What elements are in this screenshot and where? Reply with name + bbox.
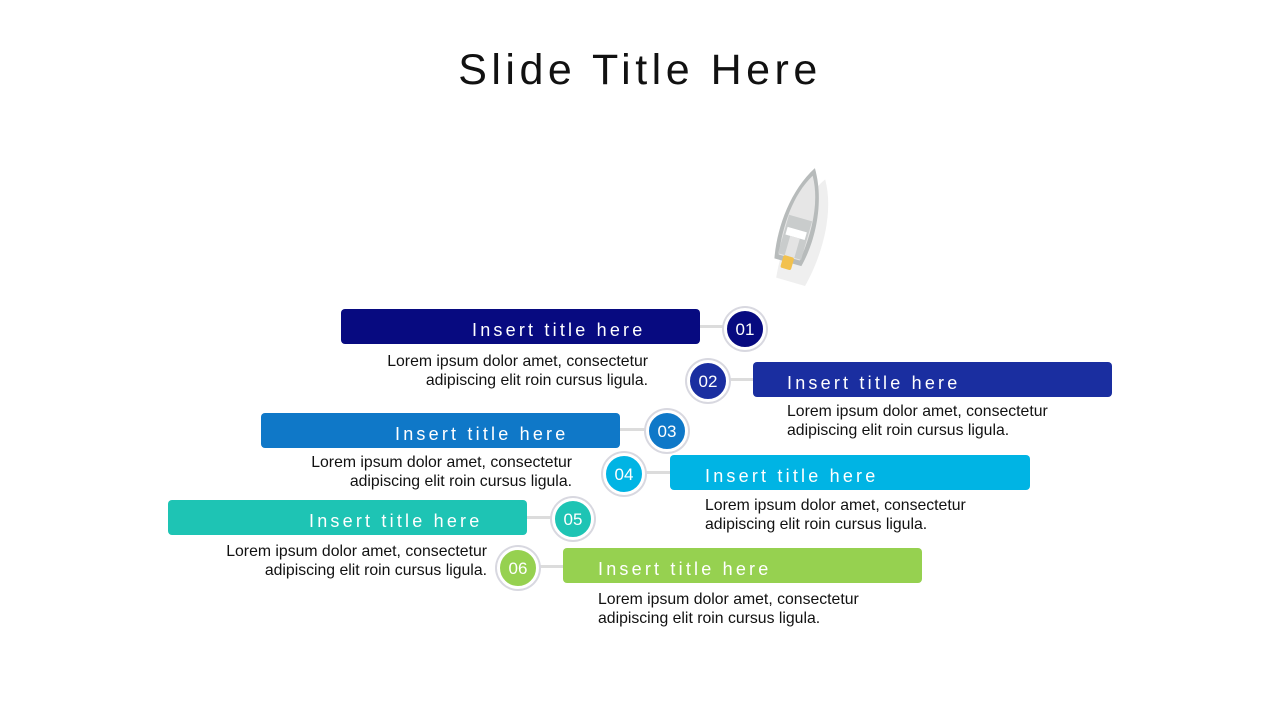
- bar 03: [261, 413, 620, 448]
- text 05: Lorem ipsum dolor amet, consectetur: [226, 543, 487, 560]
- text 03: adipiscing elit roin cursus ligula.: [350, 473, 572, 490]
- text 06: Lorem ipsum dolor amet, consectetur: [598, 591, 859, 608]
- circle 06: [497, 547, 539, 589]
- title: Slide Title Here: [458, 46, 822, 94]
- circle 01: 01: [736, 320, 754, 339]
- text 06: adipiscing elit roin cursus ligula.: [598, 610, 820, 627]
- circle 02: 02: [699, 372, 717, 391]
- text 06: [598, 591, 859, 627]
- text 01: Lorem ipsum dolor amet, consectetur: [387, 353, 648, 370]
- text 02: [787, 403, 1048, 439]
- bar 01: [341, 309, 700, 344]
- text 04: adipiscing elit roin cursus ligula.: [705, 516, 927, 533]
- circle 05: 05: [564, 510, 582, 529]
- circle 05: [552, 498, 594, 540]
- text 05: adipiscing elit roin cursus ligula.: [265, 562, 487, 579]
- text 01: adipiscing elit roin cursus ligula.: [426, 372, 648, 389]
- text 04: [705, 497, 966, 533]
- bar 05: [168, 500, 527, 535]
- text 05: [226, 543, 487, 579]
- icon: boat: [774, 168, 828, 286]
- circle 03: [646, 410, 688, 452]
- text 04: Lorem ipsum dolor amet, consectetur: [705, 497, 966, 514]
- circle 04: 04: [615, 465, 633, 484]
- text 03: [311, 454, 572, 490]
- bar 04: [670, 455, 1030, 490]
- circle 01: [724, 308, 766, 350]
- circle 03: 03: [658, 422, 676, 441]
- bar 05: Insert title here: [309, 511, 482, 531]
- circle 02: [687, 360, 729, 402]
- circle 04: [603, 453, 645, 495]
- text 01: [387, 353, 648, 389]
- circle 06: 06: [509, 559, 527, 578]
- text 02: adipiscing elit roin cursus ligula.: [787, 422, 1009, 439]
- bar 03: Insert title here: [395, 424, 568, 444]
- bar 01: Insert title here: [472, 320, 645, 340]
- bar 04: Insert title here: [705, 466, 878, 486]
- text 02: Lorem ipsum dolor amet, consectetur: [787, 403, 1048, 420]
- text 03: Lorem ipsum dolor amet, consectetur: [311, 454, 572, 471]
- bar 02: [753, 362, 1112, 397]
- bar 02: Insert title here: [787, 373, 960, 393]
- bar 06: [563, 548, 922, 583]
- bar 06: Insert title here: [598, 559, 771, 579]
